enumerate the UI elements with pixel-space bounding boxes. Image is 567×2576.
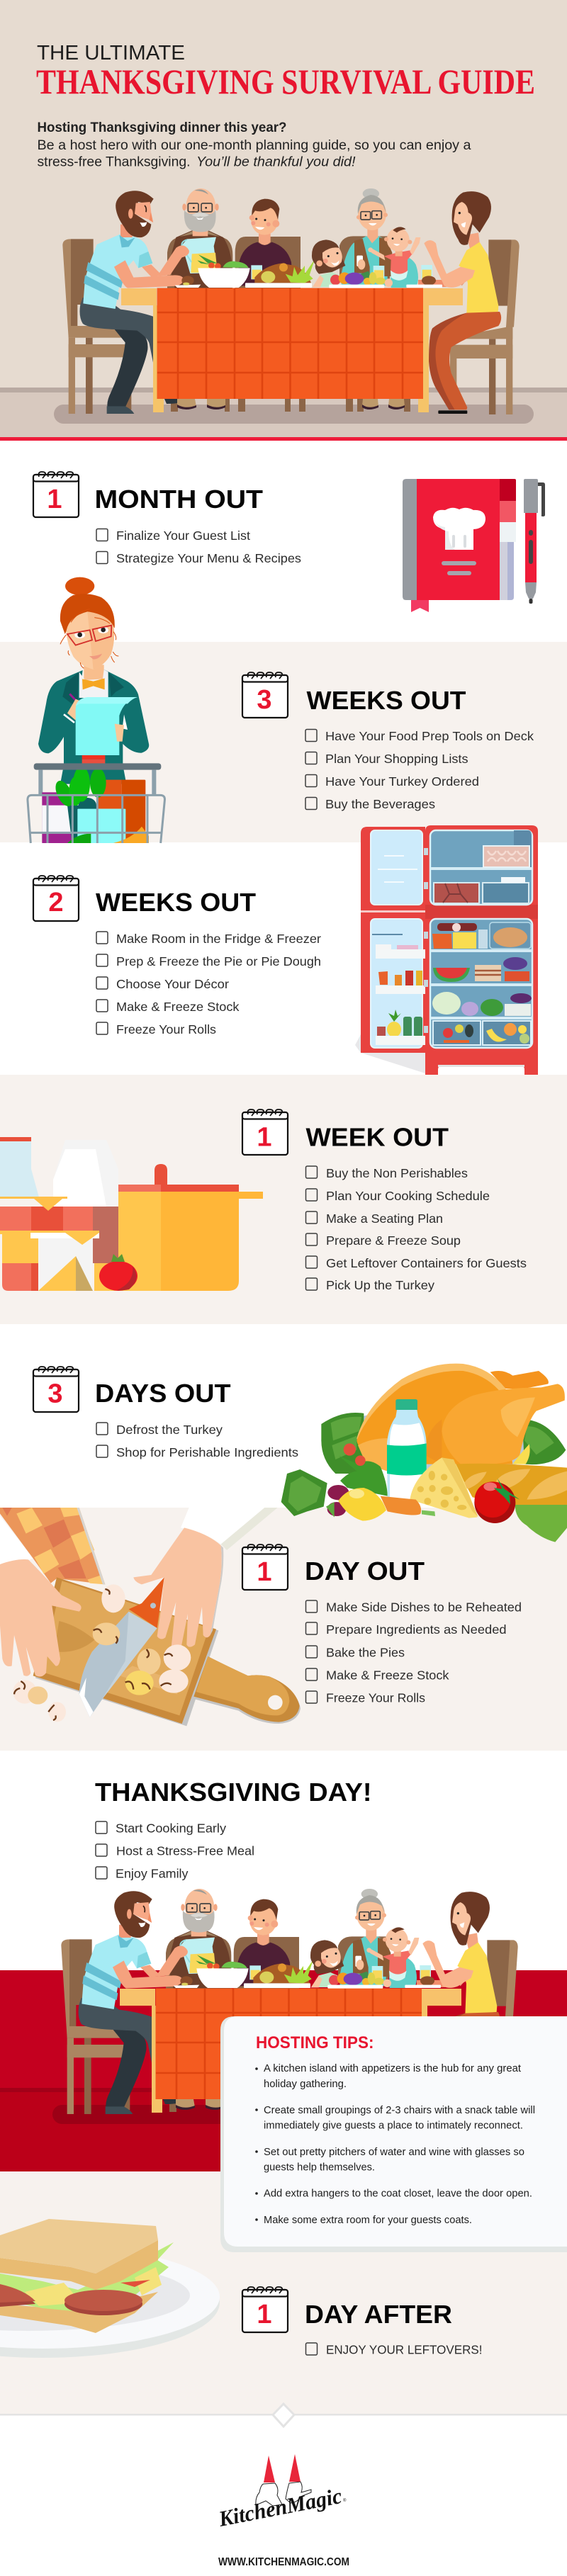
checklist: Bake the Pies (326, 1645, 405, 1659)
icon: calendar 1: 1 (257, 2300, 272, 2329)
tips list (255, 2063, 535, 2226)
checklist: Start Cooking Early (116, 1821, 226, 1835)
checklist (96, 529, 301, 565)
checklist (305, 729, 534, 811)
tips list: A kitchen island with appetizers is the hub for any great (264, 2063, 521, 2074)
panel: 1 day out (0, 1508, 522, 1726)
checklist (306, 1600, 522, 1705)
tips list: Make some extra room for your guests coats. (264, 2215, 472, 2226)
illustration: sandwich on plate (0, 2219, 220, 2358)
panel: 1 day after (0, 2219, 482, 2358)
icon: calendar 3: 3 (47, 1379, 63, 1408)
checklist: Get Leftover Containers for Guests (326, 1256, 527, 1270)
illustration: kitchen pot, carton and tomato (0, 1137, 263, 1291)
checklist: Freeze Your Rolls (326, 1690, 425, 1705)
checklist: Have Your Turkey Ordered (325, 774, 479, 789)
checklist: Make Room in the Fridge & Freezer (116, 932, 321, 946)
checklist: Plan Your Shopping Lists (325, 752, 468, 766)
checklist: Pick Up the Turkey (326, 1278, 434, 1292)
checklist: Shop for Perishable Ingredients (116, 1445, 298, 1459)
icon: calendar 3: 3 (257, 685, 272, 715)
title: THE ULTIMATE (37, 42, 185, 64)
checklist: ENJOY YOUR LEFTOVERS! (326, 2342, 482, 2356)
tips list: Set out pretty pitchers of water and wine with glasses so (264, 2147, 524, 2158)
illustration: hands chopping mushrooms (0, 1508, 301, 1726)
logo: Kitchen Magic: ® (343, 2498, 347, 2503)
panel: hosting tips (220, 2016, 567, 2252)
checklist: Strategize Your Menu & Recipes (116, 551, 301, 565)
heading: DAY AFTER (305, 2300, 452, 2329)
logo: Kitchen Magic: KitchenMagic (216, 2483, 344, 2531)
heading: WEEKS OUT (306, 686, 466, 715)
icon: calendar 1 (242, 1544, 288, 1590)
heading: DAYS OUT (95, 1379, 231, 1408)
checklist: Finalize Your Guest List (116, 529, 250, 543)
tips list: holiday gathering. (264, 2079, 347, 2090)
checklist (96, 1423, 298, 1459)
panel: 2 weeks out (33, 825, 538, 1075)
website url: WWW.KITCHENMAGIC.COM (218, 2556, 349, 2568)
tips list: Create small groupings of 2-3 chairs with a snack table will (264, 2105, 535, 2116)
checklist: Freeze Your Rolls (116, 1022, 216, 1036)
icon: calendar 1: 1 (257, 1122, 272, 1152)
checklist: Defrost the Turkey (116, 1423, 223, 1437)
illustration: family at table (61, 1889, 518, 2115)
checklist: Make & Freeze Stock (116, 1000, 240, 1014)
intro text: stress-free Thanksgiving. (37, 154, 190, 170)
icon: calendar 1 (242, 1109, 288, 1155)
heading: WEEKS OUT (96, 888, 256, 917)
tips list: immediately give guests a place to intimately reconnect. (264, 2120, 523, 2131)
checklist: Make Side Dishes to be Reheated (326, 1600, 522, 1614)
checklist: Buy the Beverages (325, 797, 435, 811)
panel: 3 days out (33, 1364, 567, 1542)
icon: calendar 2: 2 (48, 888, 64, 917)
logo: Kitchen Magic (216, 2454, 347, 2531)
checklist: Choose Your Décor (116, 977, 229, 991)
icon: calendar 2 (33, 876, 79, 921)
checklist: Prep & Freeze the Pie or Pie Dough (116, 954, 321, 968)
icon: calendar 1 (242, 2287, 288, 2332)
tips list: guests help themselves. (264, 2162, 375, 2174)
checklist (96, 1821, 254, 1880)
heading: THANKSGIVING DAY! (95, 1778, 371, 1807)
icon: calendar 1: 1 (47, 485, 62, 514)
icon: calendar 1: 1 (257, 1557, 272, 1587)
checklist (96, 932, 321, 1036)
illustration: recipe notebook and pen (403, 479, 545, 612)
checklist: Make & Freeze Stock (326, 1668, 449, 1682)
heading: WEEK OUT (306, 1122, 449, 1152)
intro text: You’ll be thankful you did! (196, 154, 356, 170)
tips heading: HOSTING TIPS: (256, 2033, 374, 2052)
intro text (37, 120, 471, 170)
illustration: woman with shopping cart (28, 577, 164, 843)
panel: 1 month out (33, 472, 545, 612)
checklist: Enjoy Family (116, 1866, 189, 1880)
icon: calendar 3 (242, 672, 288, 718)
panel: 3 weeks out (28, 577, 534, 843)
illustration: turkey and groceries (281, 1364, 567, 1542)
heading: MONTH OUT (95, 485, 263, 514)
panel: 1 week out (0, 1109, 527, 1292)
checklist: Prepare Ingredients as Needed (326, 1622, 507, 1637)
checklist: Make a Seating Plan (326, 1211, 443, 1226)
panel: thanksgiving day (0, 1778, 567, 2171)
icon: calendar 1 (33, 472, 79, 517)
title (36, 42, 535, 101)
icon: calendar 3 (33, 1367, 79, 1412)
tips list: Add extra hangers to the coat closet, leave the door open. (264, 2188, 532, 2199)
checklist: Plan Your Cooking Schedule (326, 1189, 490, 1203)
heading: DAY OUT (305, 1557, 425, 1586)
illustration: family at table (62, 188, 520, 414)
panel: header (0, 0, 567, 441)
checklist: Have Your Food Prep Tools on Deck (325, 729, 534, 743)
intro text: Be a host hero with our one-month planning guide, so you can enjoy a (37, 138, 471, 153)
checklist: Prepare & Freeze Soup (326, 1233, 461, 1248)
checklist: Host a Stress-Free Meal (116, 1843, 254, 1858)
checklist: Buy the Non Perishables (326, 1166, 468, 1180)
intro text: Hosting Thanksgiving dinner this year? (37, 120, 286, 135)
illustration: open fridge (355, 825, 538, 1075)
checklist (306, 1166, 527, 1292)
